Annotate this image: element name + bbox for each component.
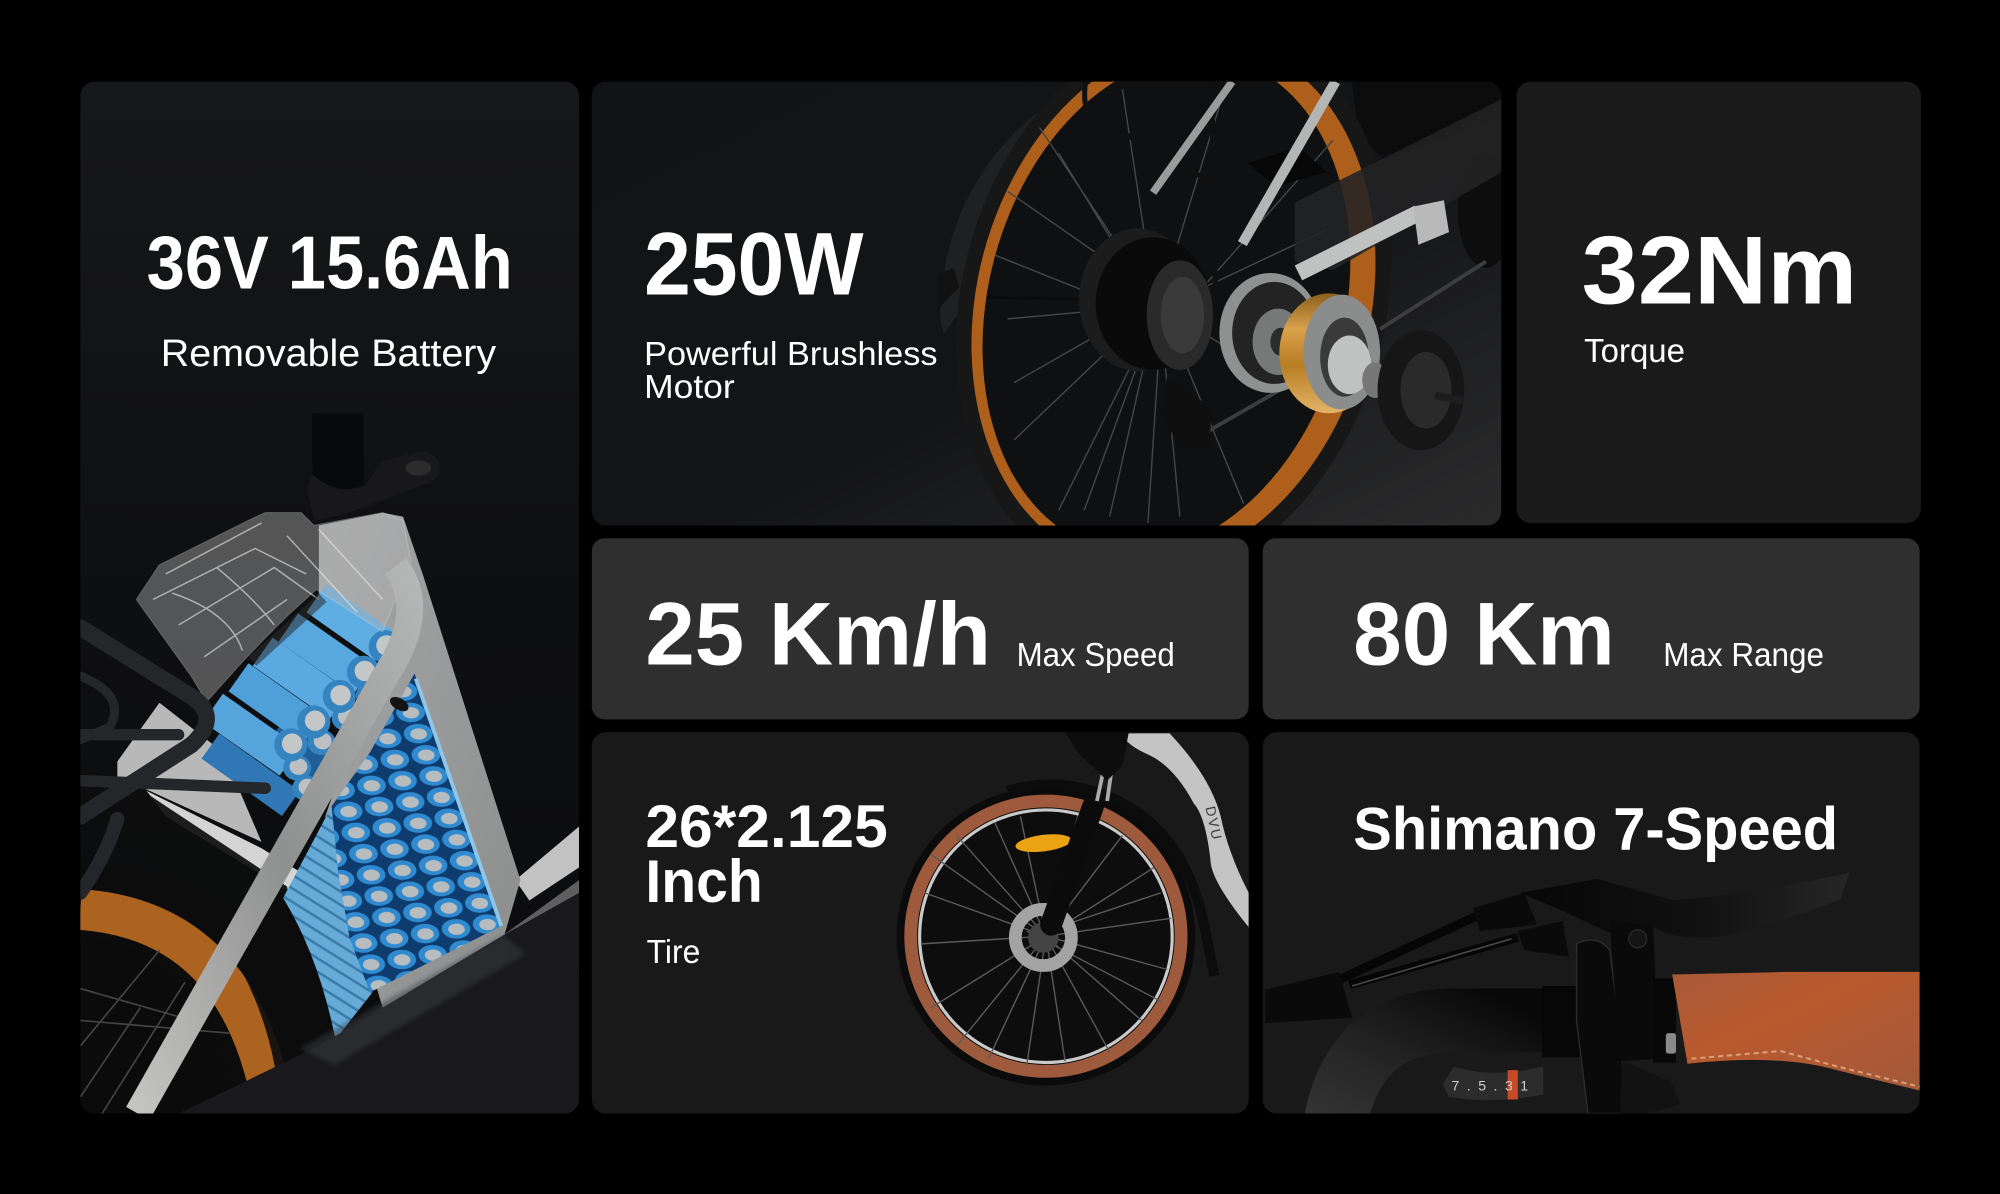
range label: Max Range (1663, 637, 1824, 674)
shift trigger (1620, 1061, 1681, 1114)
gear indicator numbers: 7 . 5 . 3 1 (1452, 1078, 1528, 1094)
battery panel illustration (80, 413, 579, 1114)
motor spec label (644, 336, 938, 406)
grip stitching (1691, 1051, 1920, 1087)
chart-like grid: battery cell ends (332, 673, 501, 992)
icon: leather grip (1672, 972, 1920, 1091)
panel: torque (1517, 82, 1921, 523)
light edge of cells (416, 679, 501, 926)
motor panel illustration (940, 82, 1501, 526)
icon: brake lever (1520, 872, 1849, 976)
transparent battery cap (136, 513, 411, 702)
range value: 80 Km (1353, 584, 1615, 684)
icon: reflector (1015, 831, 1072, 855)
icon: copper stator ring (1279, 293, 1348, 414)
head parts (1065, 732, 1129, 781)
fender shadow (150, 796, 288, 1068)
fender bracket (940, 268, 959, 306)
infographic canvas (80, 82, 1921, 1114)
range panel background (1263, 538, 1920, 719)
icon: seat post clamp (308, 413, 440, 520)
icon: gear ring (1219, 273, 1321, 393)
tire panel background (592, 732, 1249, 1114)
gear panel illustration (1265, 872, 1920, 1122)
battery spec label: Removable Battery (161, 332, 497, 375)
motor spec value: 250W (644, 214, 864, 314)
gear panel background (1263, 732, 1920, 1114)
speed value: 25 Km/h (645, 584, 991, 684)
torque label: Torque (1584, 333, 1685, 370)
panel: max range (1263, 538, 1920, 719)
icon: front wheel tire (897, 787, 1195, 1085)
torque panel background (1517, 82, 1921, 523)
speed panel background (592, 538, 1249, 719)
icon: rear wheel (80, 890, 284, 1114)
dark stay band (1295, 99, 1501, 270)
wheel brown sidewall (911, 801, 1181, 1071)
stator face (1304, 295, 1380, 409)
icon: gear indicator (1443, 1066, 1543, 1100)
panel: brushless motor (592, 82, 1502, 526)
wheel spokes (921, 816, 1171, 1065)
panel: shimano gears (1263, 732, 1920, 1122)
cables (1339, 916, 1518, 985)
chain (1193, 261, 1486, 440)
speed label: Max Speed (1017, 637, 1175, 674)
brand mark on frame: DVU (1202, 805, 1225, 843)
torque value: 32Nm (1582, 216, 1857, 325)
pedal (1248, 150, 1326, 184)
tire label: Tire (647, 934, 700, 971)
bar clamp (1542, 986, 1583, 1057)
stay line (987, 297, 1208, 302)
lever mount (1610, 921, 1658, 1061)
battery panel background (80, 82, 579, 1114)
icon: dark disc (1378, 330, 1464, 450)
fender (1008, 784, 1214, 976)
fork (1051, 806, 1093, 925)
right frame tube (515, 827, 579, 901)
wheel orange rim (971, 82, 1376, 526)
silver seat stay (1242, 82, 1335, 244)
grey battery casing (319, 513, 520, 1008)
icon: rear wheel tire (958, 84, 1369, 526)
rack (1085, 82, 1216, 300)
panel: removable battery (80, 82, 579, 1114)
icon: handlebar (1335, 1020, 1550, 1122)
icon: cassette (1147, 260, 1213, 370)
tire spec value: 26*2.125 (645, 793, 888, 860)
lower dark frame (179, 893, 579, 1114)
motor spec label: Motor (644, 369, 735, 406)
chain stay silver tube (1298, 213, 1418, 273)
grip collar (1653, 978, 1676, 1062)
icon: brake disc (1015, 909, 1071, 966)
motor housing at right (1352, 82, 1501, 159)
white head tube (1120, 733, 1249, 927)
tire panel illustration (897, 732, 1249, 1085)
tire spec value (645, 793, 888, 915)
motor spec label: Powerful Brushless (644, 336, 938, 373)
derailleur (1166, 377, 1211, 442)
battery spec value: 36V 15.6Ah (147, 220, 513, 304)
bolt on tube (390, 697, 408, 712)
white frame section (117, 703, 261, 842)
wheel spokes (995, 89, 1333, 523)
rack tubes (80, 628, 265, 893)
upper battery cylinders (210, 598, 385, 804)
battery side stripes (283, 806, 372, 1040)
panel: tire (592, 732, 1249, 1114)
cable connectors (1265, 893, 1569, 1023)
wheel inside (982, 82, 1350, 526)
gear title: Shimano 7-Speed (1353, 795, 1838, 862)
panel: max speed (592, 538, 1249, 719)
icon: hub and disc (1079, 228, 1170, 371)
motor panel background (592, 82, 1501, 526)
icon: shift lever housing (1577, 940, 1622, 1114)
diagonal frame tube (138, 566, 410, 1114)
wheel silver rim (920, 810, 1172, 1062)
fender (940, 112, 1038, 334)
tire spec value: Inch (645, 848, 763, 915)
icon: axle (1328, 335, 1371, 394)
battery end caps (274, 630, 402, 801)
